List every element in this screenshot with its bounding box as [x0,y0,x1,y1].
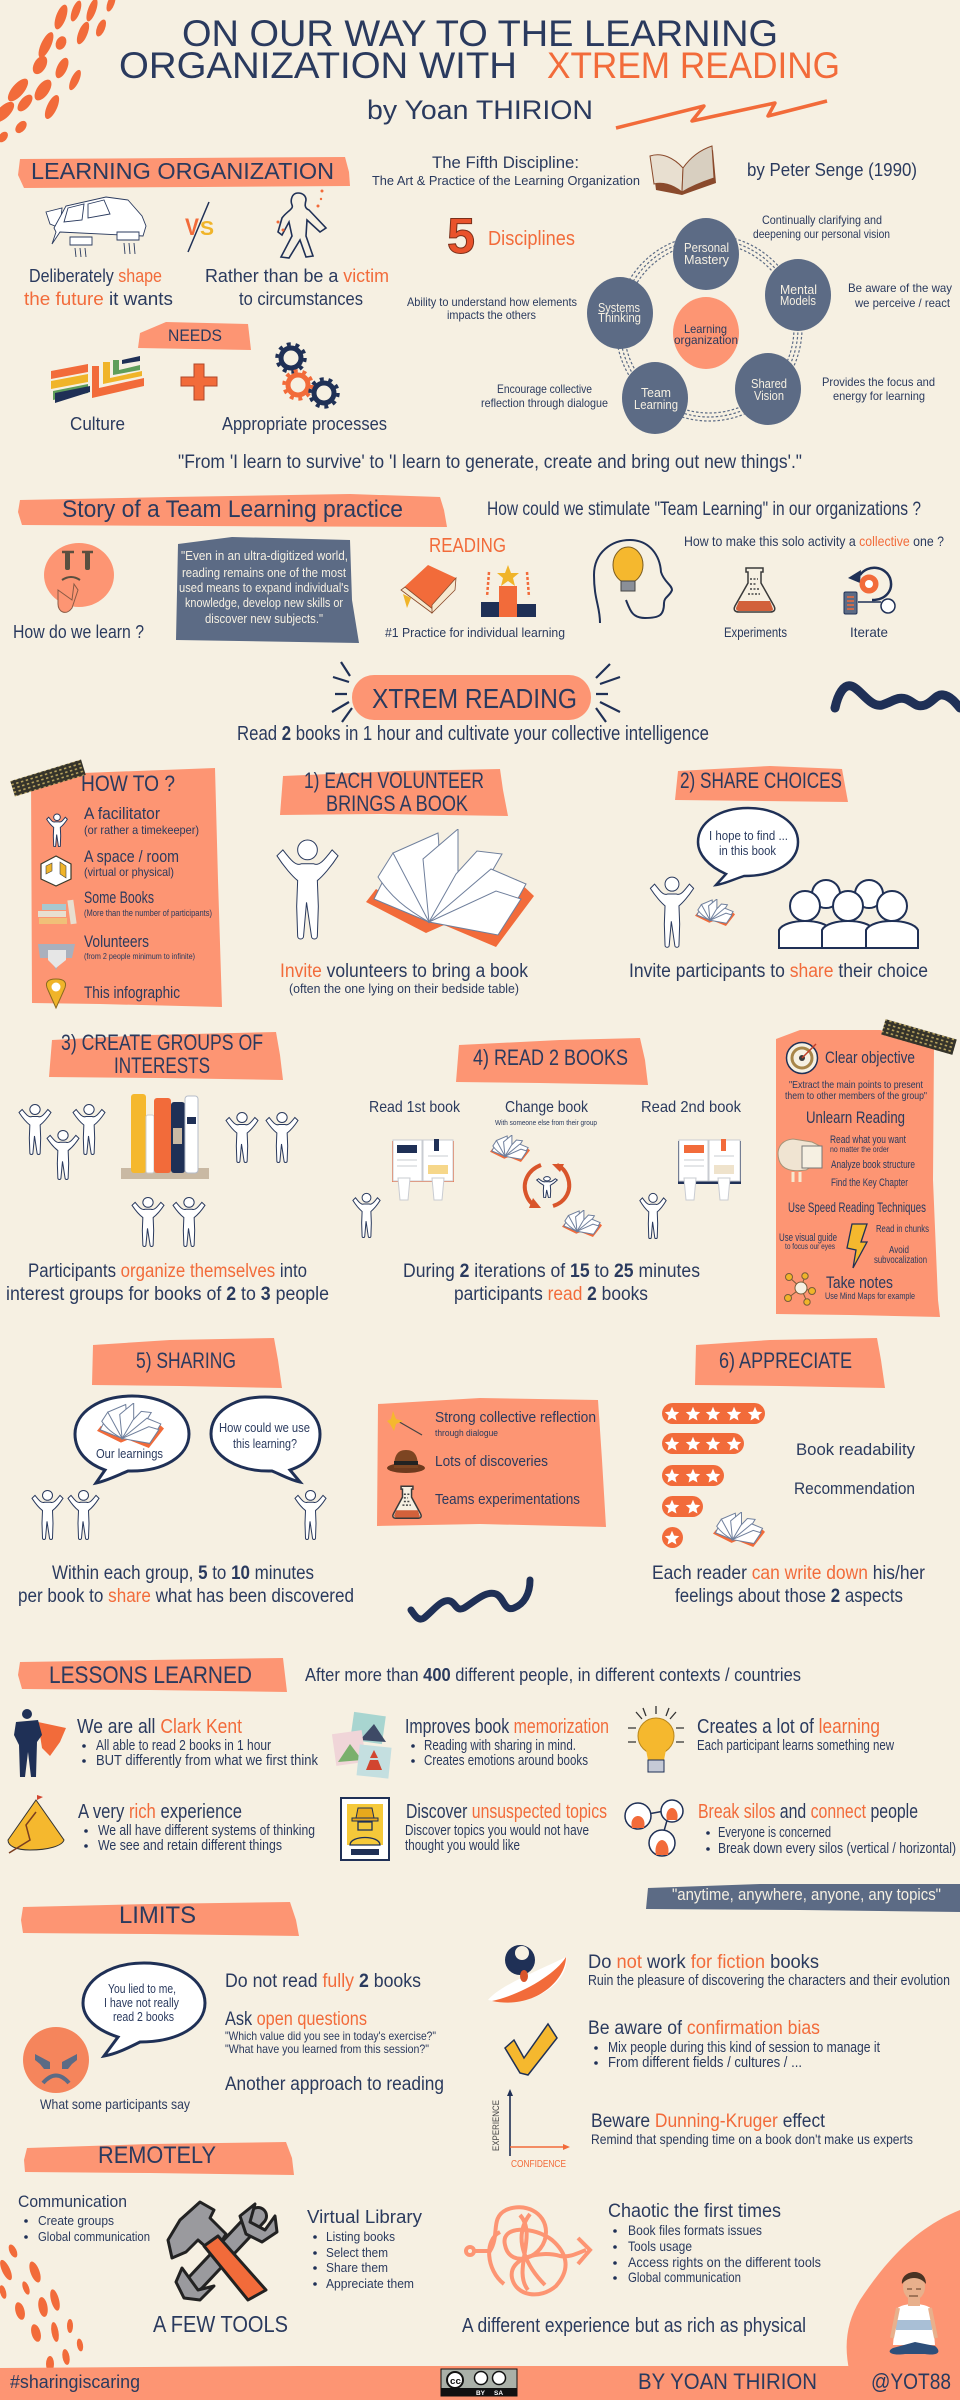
item: space: A space / room [84,847,179,866]
item: books [38,888,212,924]
quote: extract main points: "Extract the main points to present [789,1079,923,1091]
icon: iterate cycle [844,568,895,614]
speech bubble: how could we use [211,1397,320,1482]
text: each reader [652,1563,926,1607]
blob: team learning [622,362,688,434]
heading: xtrem reading pill: XTREM READING [372,683,577,714]
icon: versus: V [185,214,199,241]
icon: sharing person [650,877,694,947]
blob: shared vision [735,353,801,425]
decorative squiggle: navy [835,686,960,708]
text: confirmation bias: Be aware of confirmation bias [588,2018,820,2039]
step 2 heading: 2) SHARE CHOICES [680,768,842,793]
icon: groups of people [19,1104,298,1247]
text: after more than 400 people: After more than 400 different people, in different contexts / countries [305,1665,801,1685]
icon: superhero [14,1709,66,1777]
lesson: book memorization [332,1712,609,1779]
heading: take notes [825,1273,915,1302]
speech bubble: how could we use: this learning? [233,1436,297,1451]
notes around the disciplines cycle: energy for learning [833,389,925,403]
icon: exchange cycle [490,1135,602,1237]
heading: a few tools: A FEW TOOLS [153,2311,288,2337]
quote: extract main points: them to other members of the group" [785,1090,927,1102]
heading: story of a team learning practice: Story of a Team Learning practice [62,496,403,523]
text: limits list [225,1971,444,2095]
notes around the disciplines cycle: Continually clarifying and [762,213,882,227]
tips: unlearn reading [830,1134,915,1189]
lesson: unsuspected topics [341,1798,607,1860]
notes around the disciplines cycle: Ability to understand how elements [407,295,577,309]
icon: number five: 5 [447,208,475,264]
lesson: unsuspected topics: Discover topics you would not have [405,1822,589,1839]
heading: take notes: Take notes [826,1273,893,1292]
labels: experiments and iterate [724,624,888,640]
step 1 heading: 1) EACH VOLUNTEER [304,768,484,793]
step 1 heading: BRINGS A BOOK [326,791,468,816]
step 3 heading: 3) CREATE GROUPS OF [61,1030,263,1055]
icon: flying car [46,197,146,257]
text: virtual library list: Virtual Library [307,2207,422,2227]
item: strong collective reflection [435,1409,596,1438]
icon: wanted poster [341,1798,389,1860]
icon: photos [332,1712,392,1779]
heading: remotely: REMOTELY [98,2142,216,2169]
lesson: learning [628,1706,894,1772]
icon: mountain [8,1795,64,1853]
speech bubble: you lied to me: I have not really [104,1995,179,2010]
text: each reader: feelings about those 2 aspects [675,1586,903,1607]
heading: lessons learned: LESSONS LEARNED [49,1662,252,1689]
labels: read sequence: Read 2nd book [641,1099,742,1116]
book title: the fifth discipline: The Fifth Discipline: [432,153,579,172]
icon: versus: S [200,218,214,240]
callout: anytime anywhere [646,1884,960,1912]
icon: closed red book [401,565,456,613]
license badge: SA [494,2391,504,2397]
heading: remotely [24,2142,294,2175]
labels: culture and processes: Culture [70,414,125,434]
lesson: break silos: Break silos and connect people [698,1801,918,1823]
lesson: unsuspected topics: thought you would like [405,1837,520,1854]
text: rather than be a victim: Rather than be a victim [205,266,389,286]
text: shape the future: the future it wants [24,289,173,309]
text: dunning-kruger: Remind that spending time on a book don't make us experts [591,2131,913,2147]
heading: needs: NEEDS [168,326,222,345]
lesson: rich experience: A very rich experience [78,1801,242,1823]
item: facilitator: A facilitator [84,804,160,823]
item: infographic: This infographic [84,983,180,1002]
text: virtual library list: Share them [326,2260,388,2275]
labels: experiments and iterate: Iterate [850,624,888,640]
text: communication list: Create groups [38,2213,114,2228]
text: invite participants: Invite participants to share their choice [629,961,928,982]
label: how do we learn: How do we learn ? [13,622,144,642]
icon: podium with star [481,565,536,617]
heading: limits: LIMITS [119,1902,196,1929]
speech bubble: our learnings [75,1396,189,1483]
step 3 heading [49,1030,283,1080]
icon: reader with second book [640,1139,741,1239]
step 6 heading: 6) APPRECIATE [719,1348,852,1373]
notes around the disciplines cycle: deepening our personal vision [753,227,890,241]
icon: thinking face [44,543,114,612]
icon: magic wand [387,1411,422,1435]
panel: sharing outcomes [377,1398,606,1527]
text: different experience: A different experience but as rich as physical [462,2315,806,2337]
lesson: clark kent [14,1709,318,1777]
blob: mental models: Models [780,293,816,308]
lesson: break silos: Everyone is concerned [718,1824,831,1841]
row: two stars [662,1496,703,1517]
labels: read sequence: Change book [505,1099,589,1116]
labels: culture and processes: Appropriate processes [222,414,387,434]
icon: versus [185,202,214,252]
text: limits list: Ask open questions [225,2009,367,2030]
quote: from learn to survive: "From 'I learn to survive' to 'I learn to generate, create and bring out new things'." [178,452,802,473]
icon: check mark [505,2024,557,2075]
text: within each group [18,1563,354,1607]
tips: unlearn reading: no matter the order [830,1145,889,1154]
text: dunning-kruger [591,2111,913,2147]
step 4 heading [456,1038,648,1085]
blob: systems thinking: Systems [598,300,640,315]
tape [881,1019,957,1055]
labels: aspects: Book readability [796,1440,915,1459]
step 4 heading: 4) READ 2 BOOKS [473,1045,628,1070]
label: number one practice: #1 Practice for individual learning [385,625,565,640]
text: chaotic list: Chaotic the first times [608,2201,781,2222]
section: learning organization heading: LEARNING ORGANIZATION [31,158,334,184]
lesson: book memorization: Reading with sharing in mind. [424,1737,576,1754]
title: ORGANIZATION WITH [119,45,517,86]
icon: head with light bulb [594,540,672,623]
blob: mental models [765,259,831,331]
tape [10,760,86,796]
icon: books on shelf [121,1094,209,1179]
icon: old open book [650,146,716,195]
speech bubble: you lied to me [83,1963,205,2056]
speech bubble: I hope to find: I hope to find ... [709,828,788,843]
item: teams experimentations: Teams experimentations [435,1491,580,1508]
labels: culture and processes [70,414,387,434]
item: infographic [46,979,180,1008]
text: limits list: Another approach to reading [225,2074,444,2095]
icon: tangled line [466,2207,590,2294]
item: lots of discoveries: Lots of discoveries [435,1453,548,1470]
step 2 heading [675,766,848,802]
subtitle: read 2 books: Read 2 books in 1 hour and cultivate your collective intelligence [237,723,709,745]
text: communication list: Communication [18,2192,127,2211]
text: virtual library list: Listing books [326,2229,395,2244]
icon: culture stripes [51,356,144,403]
book title: the fifth discipline: The Art & Practice of the Learning Organization [372,173,640,188]
hashtag: #sharingiscaring [10,2372,140,2392]
text: chaotic list: Access rights on the different tools [628,2254,821,2270]
text: do not work for fiction [588,1952,950,1989]
text: chaotic list [608,2201,821,2285]
panel: how to [10,760,222,1008]
icon: light bulb [628,1706,684,1772]
lesson: learning: Creates a lot of learning [697,1716,880,1738]
heading: needs [138,322,251,350]
icon: angry face [23,2027,89,2093]
notes around the disciplines cycle: Be aware of the way [848,281,952,295]
lesson: rich experience: We all have different systems of thinking [98,1822,315,1839]
notes around the disciplines cycle: we perceive / react [854,296,951,310]
decorative dashes: top left [0,0,117,144]
panel: clear objective and techniques [776,1019,957,1317]
credit: BY YOAN THIRION [638,2369,817,2394]
text: limits list: Do not read fully 2 books [225,1971,421,1992]
text: confirmation bias: From different fields / cultures / ... [608,2054,802,2071]
lesson: rich experience: We see and retain different things [98,1837,282,1854]
icon: small open book [695,899,735,926]
tips: speed reading: to focus our eyes [785,1242,835,1251]
heading: lessons learned [18,1658,287,1692]
heading: story of a team learning practice [18,494,447,527]
tips: unlearn reading: Find the Key Chapter [831,1177,908,1189]
text: virtual library list: Select them [326,2245,388,2260]
callout: reading quote: discover new subjects." [205,611,323,626]
lesson: clark kent: We are all Clark Kent [77,1716,242,1738]
icon: sharing people [32,1490,326,1540]
text: virtual library list [307,2207,422,2291]
icon: lightning bolt [847,1224,867,1268]
row: three stars [662,1465,724,1486]
item: strong collective reflection: Strong collective reflection [435,1409,596,1426]
lesson: learning: Each participant learns something new [697,1737,894,1754]
tips: speed reading [779,1224,929,1266]
text: communication list: Global communication [38,2229,150,2244]
icon: target [786,1042,818,1074]
icon: audience group [779,880,918,948]
text: virtual library list: Appreciate them [326,2276,414,2291]
icon: gears [277,344,338,407]
blob: learning organization [673,297,739,369]
text: two iterations: During 2 iterations of 15 to 25 minutes [403,1261,700,1282]
labels: read sequence [369,1099,742,1127]
text: limits list: "Which value did you see in today's exercise?" [225,2029,436,2043]
title [119,13,840,86]
text: invite volunteers: (often the one lying on their bedside table) [289,981,519,996]
item: volunteers [38,932,195,970]
icon: explorer hat [387,1450,425,1473]
labels: experiments and iterate: Experiments [724,624,787,640]
callout: reading quote: knowledge, develop new skills or [185,595,344,610]
row: five stars [662,1403,765,1424]
item: books: Some Books [84,888,154,907]
icon: flying saucer [488,1945,566,2003]
blob: shared vision: Shared [751,376,787,391]
notes around the disciplines cycle: impacts the others [447,308,536,322]
notes around the disciplines cycle: reflection through dialogue [481,396,608,410]
license badge: BY [476,2391,485,2397]
text: rather than be a victim: to circumstances [239,289,363,309]
item: strong collective reflection: through dialogue [435,1428,498,1438]
book title: the fifth discipline [372,153,640,188]
decorative squiggle: navy [411,1580,530,1619]
text: confirmation bias [588,2018,881,2071]
blob: shared vision: Vision [754,388,784,403]
text: within each group: Within each group, 5 to 10 minutes [52,1563,314,1584]
text: do not work for fiction: Do not work for fiction books [588,1952,819,1973]
speech bubble: how could we use: How could we use [219,1420,310,1435]
blob: personal mastery [673,218,739,290]
text: limits list: "What have you learned from this session?" [225,2042,429,2056]
question: solo to collective: How to make this solo activity a collective one ? [684,533,944,549]
background blob: bottom right [847,2210,960,2400]
icon: big open book [366,829,534,947]
step 6 heading [695,1338,885,1388]
icon: victim outline [276,190,326,258]
speech bubble: you lied to me: You lied to me, [108,1981,176,1996]
labels: aspects: Recommendation [794,1479,915,1498]
icon: volunteer person [277,840,338,939]
labels: read sequence: Read 1st book [369,1099,461,1116]
icon: rated book [713,1512,765,1547]
step 1 heading [280,768,508,816]
text: chaotic list: Tools usage [628,2238,692,2254]
lesson: clark kent: All able to read 2 books in 1 hour [96,1737,271,1754]
speech bubble: our learnings: Our learnings [96,1446,163,1461]
chart: dunning-kruger axes: CONFIDENCE [511,2159,566,2170]
icon: brain reading [778,1139,822,1182]
chart: dunning-kruger axes: EXPERIENCE [491,2100,501,2151]
lesson: book memorization: Improves book memorization [405,1716,609,1738]
text: organize themselves: interest groups for books of 2 to 3 people [6,1284,329,1305]
blob: team learning: Team [641,385,671,400]
blob: learning organization: Learning [684,322,727,336]
heading: xtrem reading pill [332,662,620,722]
labels: aspects [794,1440,915,1498]
diagram: five disciplines cycle [587,218,831,434]
tips: speed reading: Avoid [889,1245,909,1256]
item: facilitator [47,804,199,847]
heading: clear objective: Clear objective [825,1048,915,1067]
tips: speed reading: Use visual guide [779,1232,837,1244]
text: confirmation bias: Mix people during this kind of session to manage it [608,2039,881,2056]
callout: reading quote [176,537,359,643]
lesson: unsuspected topics: Discover unsuspected topics [406,1801,607,1823]
heading: disciplines: Disciplines [488,228,575,250]
lesson: book memorization: Creates emotions around books [424,1752,588,1769]
blob: personal mastery: Personal [684,240,729,255]
label: what participants say: What some participants say [40,2096,190,2112]
lesson: rich experience [8,1795,315,1854]
rating stars chart [662,1403,765,1548]
icon: connected people [625,1800,683,1856]
quote: extract main points [785,1079,927,1102]
avatar: author [890,2272,938,2355]
item: space: (virtual or physical) [84,865,174,879]
text: organize themselves [6,1261,329,1305]
blob: personal mastery: Mastery [684,252,729,267]
item: volunteers: Volunteers [84,932,149,951]
text: chaotic list: Global communication [628,2269,741,2285]
speech bubble: I hope to find [698,808,798,885]
item: books: (More than the number of participants) [84,908,212,918]
icon: small flask [393,1486,421,1518]
text: within each group: per book to share what has been discovered [18,1586,354,1607]
tips: unlearn reading: Read what you want [830,1134,906,1146]
heading: unlearn reading: Unlearn Reading [806,1108,905,1127]
lesson: break silos [625,1800,956,1857]
text: organize themselves: Participants organize themselves into [28,1261,307,1282]
text: two iterations [403,1261,700,1305]
tips: speed reading: Read in chunks [876,1224,929,1235]
callout: reading quote: reading remains one of the most [182,565,346,580]
license badge: cc [450,2376,461,2386]
step 5 heading: 5) SHARING [136,1348,236,1373]
callout: reading quote: used means to expand individual's [179,580,349,595]
notes around the disciplines cycle: Provides the focus and [822,375,935,389]
author: peter senge: by Peter Senge (1990) [747,160,917,180]
blob: learning organization: organization [674,333,738,347]
tips: unlearn reading: Analyze book structure [831,1159,915,1171]
text: two iterations: participants read 2 books [454,1284,648,1305]
text: chaotic list: Book files formats issues [628,2222,762,2238]
row: four stars [662,1433,744,1454]
title: XTREM READING [547,45,840,86]
text: each reader: Each reader can write down his/her [652,1563,926,1584]
speech bubble: I hope to find: in this book [719,843,776,858]
heading: how to: HOW TO ? [81,771,175,796]
item: volunteers: (from 2 people minimum to infinite) [84,951,195,961]
text: invite volunteers: Invite volunteers to bring a book [280,961,528,982]
text: rather than be a victim [205,266,389,309]
icon: experiments flask [734,568,775,612]
zigzag underline [616,101,827,128]
blob: systems thinking: Thinking [598,310,641,325]
callout: reading quote: "Even in an ultra-digitized world, [181,548,348,563]
labels: read sequence: With someone else from their group [495,1120,597,1127]
step 3 heading: INTERESTS [114,1053,210,1078]
heading: limits [21,1902,299,1936]
icon: reader with first book [353,1139,454,1238]
blob: mental models: Mental [780,282,817,297]
blob: team learning: Learning [634,397,678,412]
lesson: clark kent: BUT differently from what we first think [96,1752,318,1769]
notes around the disciplines cycle [407,213,952,410]
blob: systems thinking [587,277,653,349]
author byline: by Yoan THIRION [367,95,593,125]
item: space [41,847,179,886]
decorative dashes: bottom left [0,2243,84,2372]
step 5 heading [92,1338,282,1388]
icon: plus [181,364,217,400]
title: ON OUR WAY TO THE LEARNING [182,13,778,54]
speech bubble: you lied to me: read 2 books [113,2009,174,2024]
item: facilitator: (or rather a timekeeper) [84,823,199,837]
chart: dunning-kruger axes [491,2089,570,2170]
heading: reading: READING [429,535,506,557]
text: shape the future [24,266,173,309]
text: shape the future: Deliberately shape [29,266,162,286]
heading: take notes: Use Mind Maps for example [825,1291,915,1302]
notes around the disciplines cycle: Encourage collective [497,382,592,396]
tips: speed reading: subvocalization [874,1255,927,1266]
row: one star [662,1527,683,1548]
icon: hammer and wrench [168,2202,277,2300]
text: dunning-kruger: Beware Dunning-Kruger effect [591,2111,826,2132]
icon: mind map [784,1273,816,1305]
footer band [0,2366,960,2400]
text: invite volunteers [280,961,528,996]
license badge [441,2369,517,2397]
text: communication list [18,2192,150,2244]
